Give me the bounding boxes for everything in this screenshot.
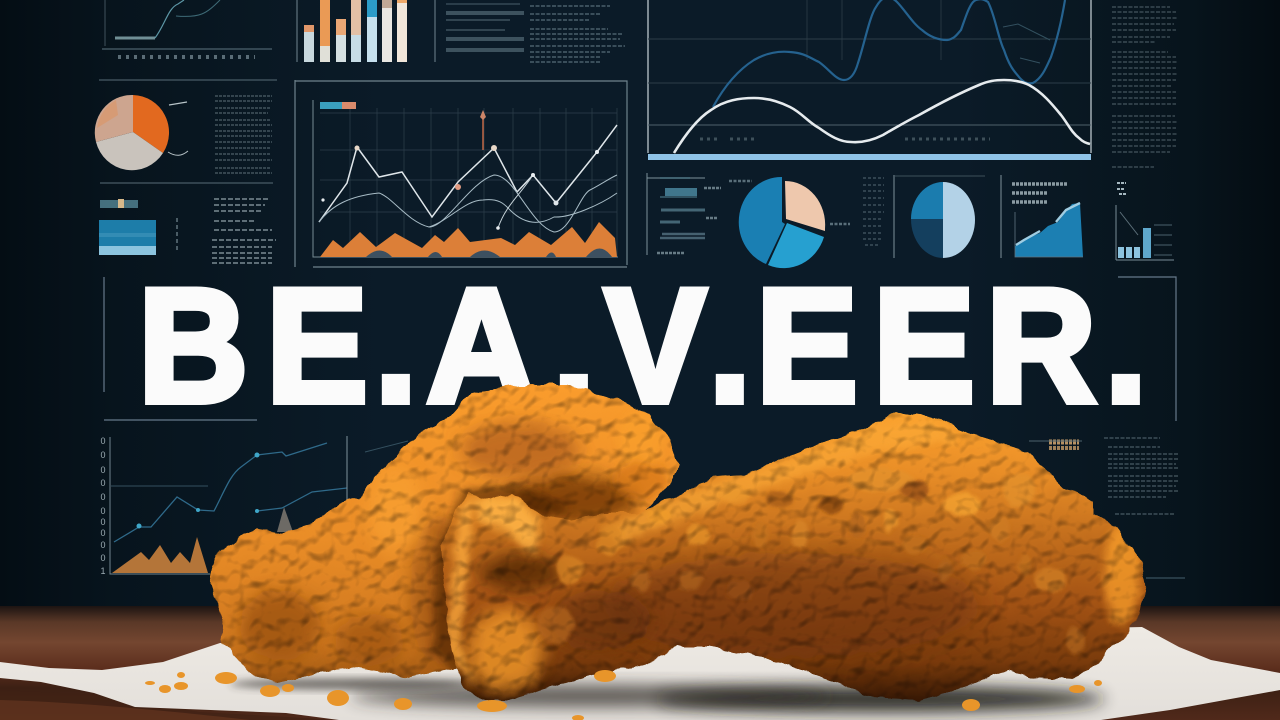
axis labels: 0 [100, 465, 106, 475]
panel: large curve chart [648, 0, 1091, 160]
title: BE.A.V.EER. [138, 256, 1147, 437]
chicken drumstick piece [441, 412, 1146, 700]
chicken thigh piece [210, 385, 679, 690]
panel: lower-left line and area chart [100, 436, 408, 576]
axis labels: 0 [100, 540, 106, 550]
panel: half-light pie chart [894, 175, 1001, 258]
axis labels: 0 [100, 450, 106, 460]
chicken shadow [230, 678, 1105, 712]
text block: pie notes [215, 96, 272, 173]
axis labels: 0 [100, 517, 106, 527]
crumbs on paper [145, 670, 1102, 720]
text block: lower-right notes [1029, 438, 1185, 578]
panel: horizontal bars chart [647, 173, 850, 255]
axis labels: 0 [100, 436, 106, 446]
thigh shading [240, 410, 666, 666]
text block: small table [863, 178, 884, 245]
panel: blue pie chart [739, 177, 825, 268]
panel: main line chart [295, 80, 627, 267]
text block: top column notes [446, 4, 625, 62]
text block: blue block table [212, 199, 276, 263]
drumstick shading [445, 420, 1140, 692]
wooden table [0, 606, 1280, 720]
panel: blue block chart [99, 199, 177, 255]
axis labels [100, 436, 106, 576]
axis labels: 0 [100, 506, 106, 516]
text block: right column notes [1112, 7, 1178, 167]
panel: small bar chart [1116, 183, 1174, 260]
title frame [104, 277, 1176, 421]
illustration: fried chicken [210, 385, 1146, 700]
axis labels: 1 [100, 566, 106, 576]
crispy crumbs on drumstick [537, 468, 1085, 654]
axis labels: 0 [100, 553, 106, 563]
panel: top bar chart [297, 0, 435, 62]
drumstick contact shadow [434, 484, 570, 680]
panel: orange pie chart [95, 80, 277, 183]
axis labels: 0 [100, 492, 106, 502]
axis labels: 0 [100, 528, 106, 538]
panel: blue area chart [1012, 184, 1083, 257]
paper sheet [0, 627, 1280, 720]
panel: top-left line chart [102, 0, 272, 57]
axis labels: 0 [100, 478, 106, 488]
